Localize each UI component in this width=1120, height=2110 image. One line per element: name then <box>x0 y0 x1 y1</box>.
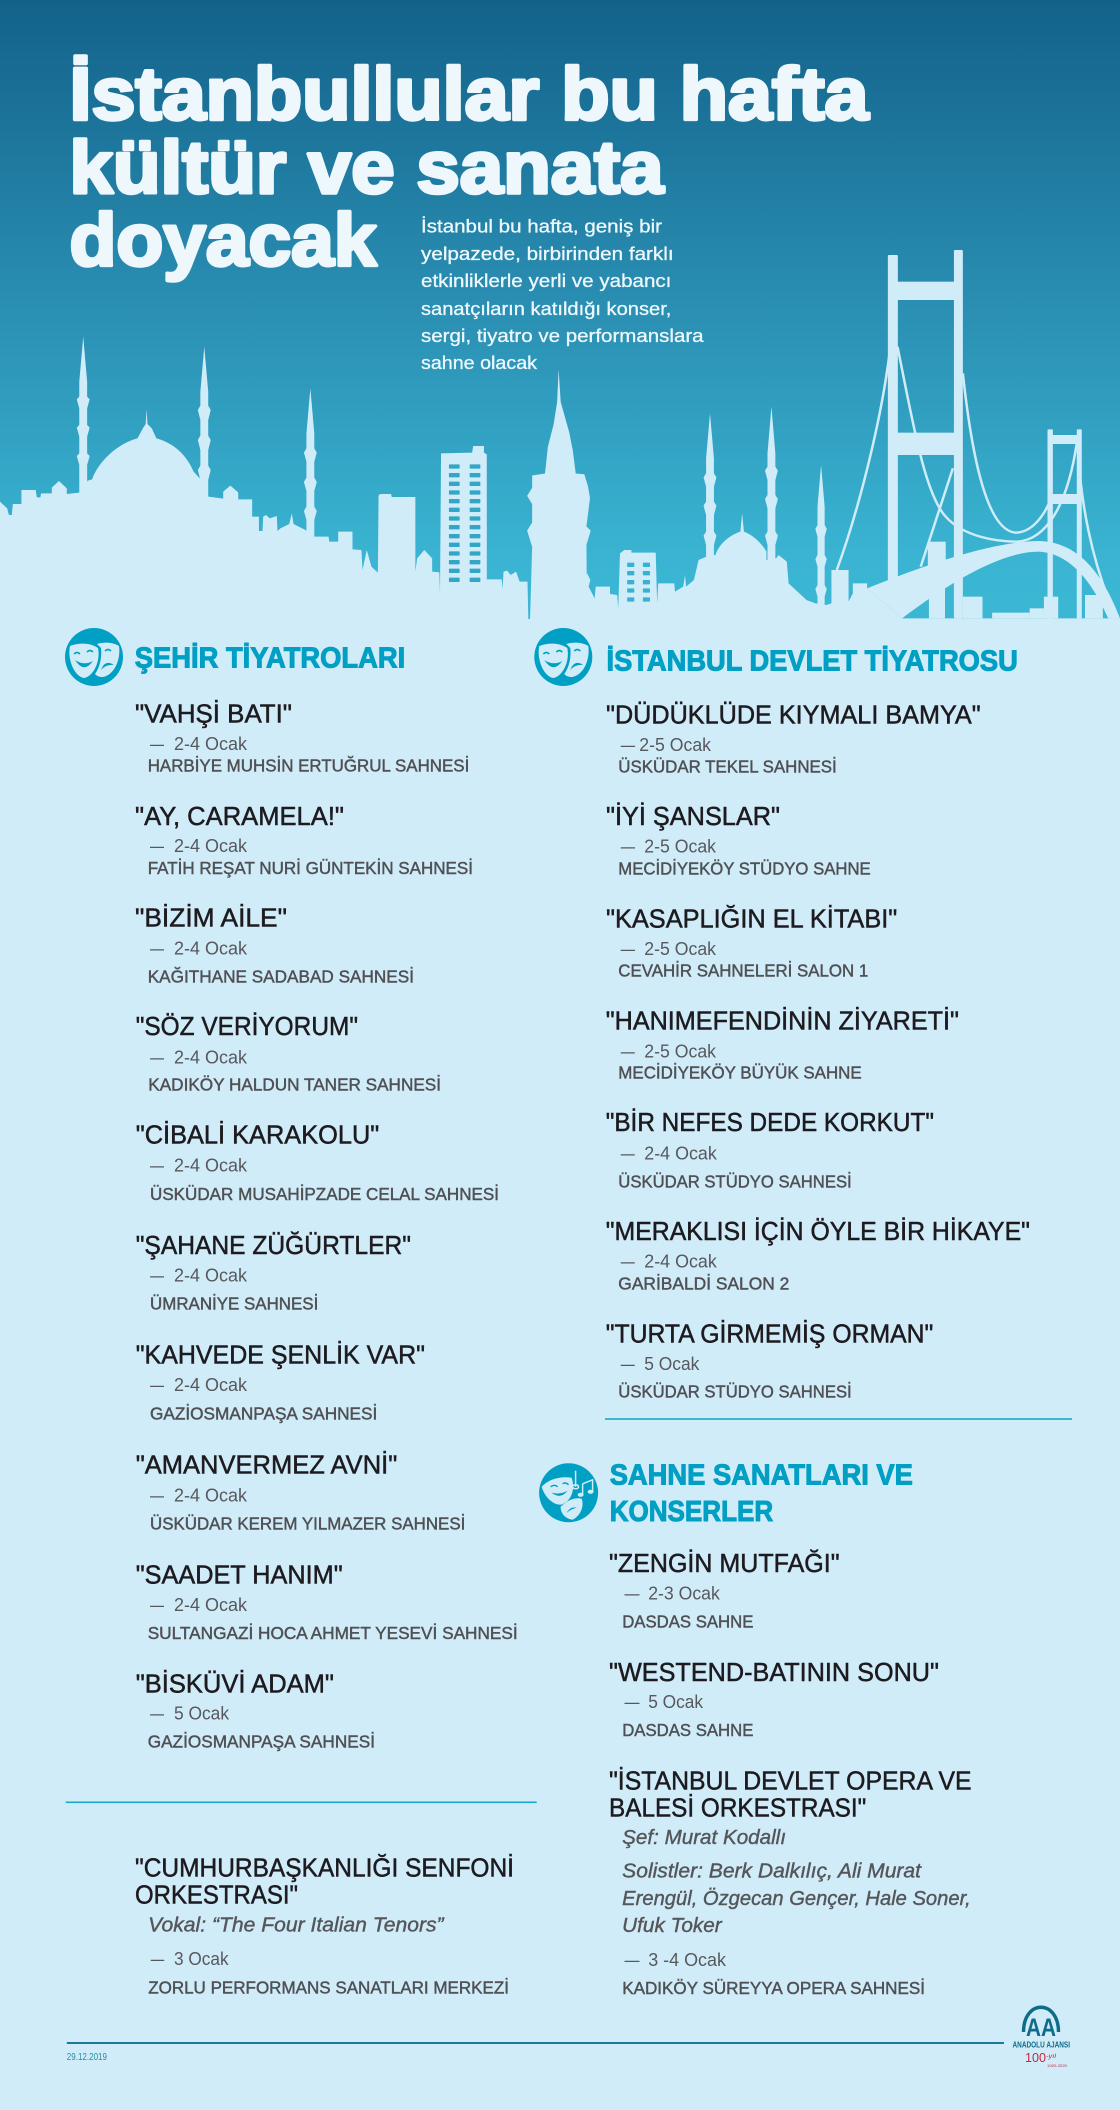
intro paragraph: İstanbul bu hafta, geniş bir <box>421 216 662 237</box>
item: Bir Nefes Dede Korkut <box>606 1107 934 1191</box>
item: Amanvermez Avni: — <box>150 1484 164 1505</box>
logo: Anadolu Ajansı 100th year: AA <box>1026 2014 1056 2042</box>
item: Şahane Züğürtler: "ŞAHANE ZÜĞÜRTLER" <box>136 1230 411 1260</box>
item: Saadet Hanım: 2-4 Ocak <box>174 1594 248 1615</box>
title: İstanbullular bu hafta <box>70 52 869 136</box>
item: Kasaplığın El Kitabı: — <box>621 938 635 959</box>
intro paragraph <box>421 216 704 373</box>
skyline: Galata tower <box>527 369 591 620</box>
item: Vahşi Batı: HARBİYE MUHSİN ERTUĞRUL SAHNESİ <box>148 755 469 776</box>
item: Söz Veriyorum: — <box>150 1046 164 1067</box>
item: İstanbul Devlet Opera ve Balesi Orkestrası: BALESİ ORKESTRASI" <box>609 1793 866 1823</box>
item: Ay, Caramela! <box>135 801 473 878</box>
item: İyi Şanslar: "İYİ ŞANSLAR" <box>606 801 780 831</box>
item: Bisküvi Adam: GAZİOSMANPAŞA SAHNESİ <box>148 1732 375 1752</box>
heading: Sahne Sanatları ve Konserler: KONSERLER <box>610 1496 773 1528</box>
item: Westend-Batının Sonu: — <box>624 1691 640 1712</box>
item: Hanımefendinin Ziyareti: — <box>621 1040 635 1061</box>
item: Westend-Batının Sonu: "WESTEND-BATININ SONU" <box>609 1657 939 1687</box>
item: Meraklısı İçin Öyle Bir Hikaye <box>606 1216 1030 1293</box>
item: Vahşi Batı: — <box>150 733 164 754</box>
panel: Sahne Sanatları ve Konserler <box>539 1460 972 1998</box>
item: Ay, Caramela!: "AY, CARAMELA!" <box>135 801 344 831</box>
item: Bisküvi Adam <box>136 1668 375 1752</box>
item: Saadet Hanım: "SAADET HANIM" <box>136 1559 343 1589</box>
item: Cumhurbaşkanlığı Senfoni Orkestrası: — <box>151 1948 165 1969</box>
item: Westend-Batının Sonu: DASDAS SAHNE <box>622 1720 753 1740</box>
title: kültür ve sanata <box>70 126 664 209</box>
item: Düdüklüde Kıymalı Bamya: ÜSKÜDAR TEKEL SAHNESİ <box>618 757 837 777</box>
intro paragraph: sahne olacak <box>421 352 538 373</box>
item: Şahane Züğürtler: ÜMRANİYE SAHNESİ <box>150 1293 318 1313</box>
item: Düdüklüde Kıymalı Bamya: 2-5 Ocak <box>639 734 712 755</box>
item: Saadet Hanım: — <box>150 1594 164 1615</box>
item: Ay, Caramela!: 2-4 Ocak <box>174 835 248 856</box>
item: Kahvede Şenlik Var: "KAHVEDE ŞENLİK VAR" <box>136 1339 425 1369</box>
item: Zengin Mutfağı: 2-3 Ocak <box>648 1582 721 1603</box>
item: Hanımefendinin Ziyareti: MECİDİYEKÖY BÜYÜK SAHNE <box>618 1063 862 1083</box>
header sky background <box>0 0 1120 619</box>
item: Cumhurbaşkanlığı Senfoni Orkestrası: Vokal: “The Four Italian Tenors” <box>148 1915 445 1937</box>
item: Vahşi Batı: "VAHŞİ BATI" <box>135 699 292 729</box>
item: Bir Nefes Dede Korkut: — <box>621 1142 635 1163</box>
item: İyi Şanslar: 2-5 Ocak <box>644 836 717 857</box>
intro paragraph: sergi, tiyatro ve performanslara <box>421 325 704 346</box>
item: Bizim Aile: KAĞITHANE SADABAD SAHNESİ <box>148 965 414 986</box>
logo: Anadolu Ajansı 100th year: ANADOLU AJANSI <box>1012 2040 1070 2050</box>
item: İstanbul Devlet Opera ve Balesi Orkestrası: Ufuk Toker <box>622 1915 723 1937</box>
illustration: Istanbul skyline <box>0 250 1120 630</box>
item: Söz Veriyorum: KADIKÖY HALDUN TANER SAHNESİ <box>148 1075 441 1095</box>
item: Kahvede Şenlik Var: 2-4 Ocak <box>174 1374 248 1395</box>
item: Cibali Karakolu: "CİBALİ KARAKOLU" <box>136 1119 379 1149</box>
item: Turta Girmemiş Orman: 5 Ocak <box>644 1353 700 1374</box>
item: Şahane Züğürtler: — <box>150 1265 164 1286</box>
item: Meraklısı İçin Öyle Bir Hikaye: 2-4 Ocak <box>644 1251 718 1272</box>
item: Saadet Hanım <box>136 1559 518 1643</box>
icon: masks and music notes <box>539 1463 598 1522</box>
item: Kasaplığın El Kitabı: CEVAHİR SAHNELERİ SALON 1 <box>618 961 868 981</box>
item: Zengin Mutfağı: DASDAS SAHNE <box>622 1611 753 1631</box>
item: Amanvermez Avni: "AMANVERMEZ AVNİ" <box>136 1449 397 1479</box>
item: Cumhurbaşkanlığı Senfoni Orkestrası: "CUMHURBAŞKANLIĞI SENFONİ <box>135 1853 514 1883</box>
item: Amanvermez Avni <box>136 1449 465 1533</box>
item: Ay, Caramela!: FATİH REŞAT NURİ GÜNTEKİN SAHNESİ <box>148 858 473 878</box>
item: Cibali Karakolu: 2-4 Ocak <box>174 1155 248 1176</box>
logo: Anadolu Ajansı 100th year: -yıl <box>1046 2054 1057 2060</box>
skyline: right mosque and Bosphorus bridge <box>560 250 1120 630</box>
intro paragraph: sanatçıların katıldığı konser, <box>421 298 671 319</box>
item: Amanvermez Avni: 2-4 Ocak <box>174 1484 248 1505</box>
item: İstanbul Devlet Opera ve Balesi Orkestrası <box>609 1766 972 1998</box>
item: Söz Veriyorum: 2-4 Ocak <box>174 1046 248 1067</box>
panel: Şehir Tiyatroları <box>65 628 518 1752</box>
item: Söz Veriyorum <box>136 1011 441 1095</box>
item: İstanbul Devlet Opera ve Balesi Orkestrası: Şef: Murat Kodallı <box>622 1827 786 1849</box>
item: Şahane Züğürtler: 2-4 Ocak <box>174 1265 248 1286</box>
item: Bizim Aile: "BİZİM AİLE" <box>135 903 287 933</box>
item: Söz Veriyorum: "SÖZ VERİYORUM" <box>136 1011 358 1041</box>
item: İyi Şanslar <box>606 801 871 878</box>
item: Turta Girmemiş Orman: "TURTA GİRMEMİŞ ORMAN" <box>606 1318 933 1348</box>
item: Hanımefendinin Ziyareti: 2-5 Ocak <box>644 1040 717 1061</box>
item: Hanımefendinin Ziyareti <box>606 1005 959 1083</box>
item: Cumhurbaşkanlığı Senfoni Orkestrası <box>135 1853 514 1997</box>
logo: Anadolu Ajansı 100th year: 100 <box>1025 2050 1046 2065</box>
item: Meraklısı İçin Öyle Bir Hikaye: "MERAKLISI İÇİN ÖYLE BİR HİKAYE" <box>606 1216 1030 1246</box>
item: Hanımefendinin Ziyareti: "HANIMEFENDİNİN ZİYARETİ" <box>606 1005 959 1035</box>
item: İstanbul Devlet Opera ve Balesi Orkestrası: Solistler: Berk Dalkılıç, Ali Murat <box>622 1860 923 1882</box>
item: Saadet Hanım: SULTANGAZİ HOCA AHMET YESEVİ SAHNESİ <box>148 1623 518 1643</box>
logo: Anadolu Ajansı 100th year <box>1012 2007 1070 2068</box>
item: Meraklısı İçin Öyle Bir Hikaye: — <box>621 1251 635 1272</box>
item: Zengin Mutfağı <box>609 1548 840 1631</box>
item: Westend-Batının Sonu <box>609 1657 939 1740</box>
item: Westend-Batının Sonu: 5 Ocak <box>648 1691 704 1712</box>
item: İstanbul Devlet Opera ve Balesi Orkestrası: — <box>624 1949 640 1970</box>
intro paragraph: yelpazede, birbirinden farklı <box>421 243 674 264</box>
item: Vahşi Batı: 2-4 Ocak <box>174 733 248 754</box>
item: Bizim Aile: — <box>150 937 164 958</box>
heading: Sahne Sanatları ve Konserler: SAHNE SANATLARI VE <box>610 1460 913 1492</box>
item: Turta Girmemiş Orman <box>606 1318 933 1402</box>
item: Cibali Karakolu: — <box>150 1155 164 1176</box>
intro paragraph: etkinliklerle yerli ve yabancı <box>421 270 671 291</box>
item: Cibali Karakolu <box>136 1119 499 1204</box>
item: Bisküvi Adam: — <box>150 1702 164 1723</box>
panel: İstanbul Devlet Tiyatrosu <box>534 628 1030 1402</box>
item: Bir Nefes Dede Korkut: "BİR NEFES DEDE KORKUT" <box>606 1107 934 1137</box>
item: Düdüklüde Kıymalı Bamya <box>606 699 981 777</box>
item: Amanvermez Avni: ÜSKÜDAR KEREM YILMAZER SAHNESİ <box>150 1513 465 1533</box>
item: Cumhurbaşkanlığı Senfoni Orkestrası: 3 Ocak <box>174 1948 229 1969</box>
item: Düdüklüde Kıymalı Bamya: — <box>621 734 635 755</box>
title: doyacak <box>70 199 377 282</box>
item: Bir Nefes Dede Korkut: ÜSKÜDAR STÜDYO SAHNESİ <box>618 1171 852 1191</box>
item: Kasaplığın El Kitabı: 2-5 Ocak <box>644 938 717 959</box>
item: Ay, Caramela!: — <box>150 835 164 856</box>
item: Bisküvi Adam: 5 Ocak <box>174 1702 230 1723</box>
item: İstanbul Devlet Opera ve Balesi Orkestrası: KADIKÖY SÜREYYA OPERA SAHNESİ <box>622 1978 925 1998</box>
item: Cumhurbaşkanlığı Senfoni Orkestrası: ORKESTRASI" <box>135 1879 298 1909</box>
item: Bizim Aile <box>135 903 414 986</box>
date stamp: 29.12.2019 <box>67 2051 107 2063</box>
item: Zengin Mutfağı: — <box>624 1582 640 1603</box>
item: Kasaplığın El Kitabı: "KASAPLIĞIN EL KİTABI" <box>606 903 897 933</box>
item: İyi Şanslar: MECİDİYEKÖY STÜDYO SAHNE <box>618 858 871 878</box>
item: Kahvede Şenlik Var: GAZİOSMANPAŞA SAHNESİ <box>150 1403 377 1423</box>
item: Şahane Züğürtler <box>136 1230 411 1313</box>
item: Bisküvi Adam: "BİSKÜVİ ADAM" <box>136 1668 334 1698</box>
item: İstanbul Devlet Opera ve Balesi Orkestrası: 3 -4 Ocak <box>648 1949 727 1970</box>
item: Düdüklüde Kıymalı Bamya: "DÜDÜKLÜDE KIYMALI BAMYA" <box>606 699 981 729</box>
icon: theatre masks <box>534 628 592 686</box>
item: Bizim Aile: 2-4 Ocak <box>174 937 248 958</box>
item: İstanbul Devlet Opera ve Balesi Orkestrası: Erengül, Özgecan Gençer, Hale Soner, <box>622 1888 971 1910</box>
item: Turta Girmemiş Orman: — <box>621 1353 635 1374</box>
item: Vahşi Batı <box>135 699 469 776</box>
heading: Şehir Tiyatroları: ŞEHİR TİYATROLARI <box>135 642 405 674</box>
item: Kasaplığın El Kitabı <box>606 903 897 981</box>
item: Kahvede Şenlik Var <box>136 1339 425 1423</box>
heading: İstanbul Devlet Tiyatrosu: İSTANBUL DEVLET TİYATROSU <box>606 646 1018 678</box>
item: Zengin Mutfağı: "ZENGİN MUTFAĞI" <box>609 1548 840 1578</box>
item: İstanbul Devlet Opera ve Balesi Orkestrası: "İSTANBUL DEVLET OPERA VE <box>609 1766 972 1796</box>
skyline: left mosque and buildings <box>0 337 529 630</box>
title <box>70 52 869 282</box>
logo: Anadolu Ajansı 100th year: 1920-2020 <box>1047 2064 1067 2068</box>
item: Cibali Karakolu: ÜSKÜDAR MUSAHİPZADE CELAL SAHNESİ <box>150 1184 499 1204</box>
item: Turta Girmemiş Orman: ÜSKÜDAR STÜDYO SAHNESİ <box>618 1382 852 1402</box>
item: Kahvede Şenlik Var: — <box>150 1374 164 1395</box>
item: Cumhurbaşkanlığı Senfoni Orkestrası: ZORLU PERFORMANS SANATLARI MERKEZİ <box>148 1977 509 1997</box>
icon: theatre masks <box>65 628 123 686</box>
item: Bir Nefes Dede Korkut: 2-4 Ocak <box>644 1142 718 1163</box>
heading: Sahne Sanatları ve Konserler <box>610 1460 913 1528</box>
item: Meraklısı İçin Öyle Bir Hikaye: GARİBALDİ SALON 2 <box>618 1273 789 1293</box>
item: İyi Şanslar: — <box>621 836 635 857</box>
